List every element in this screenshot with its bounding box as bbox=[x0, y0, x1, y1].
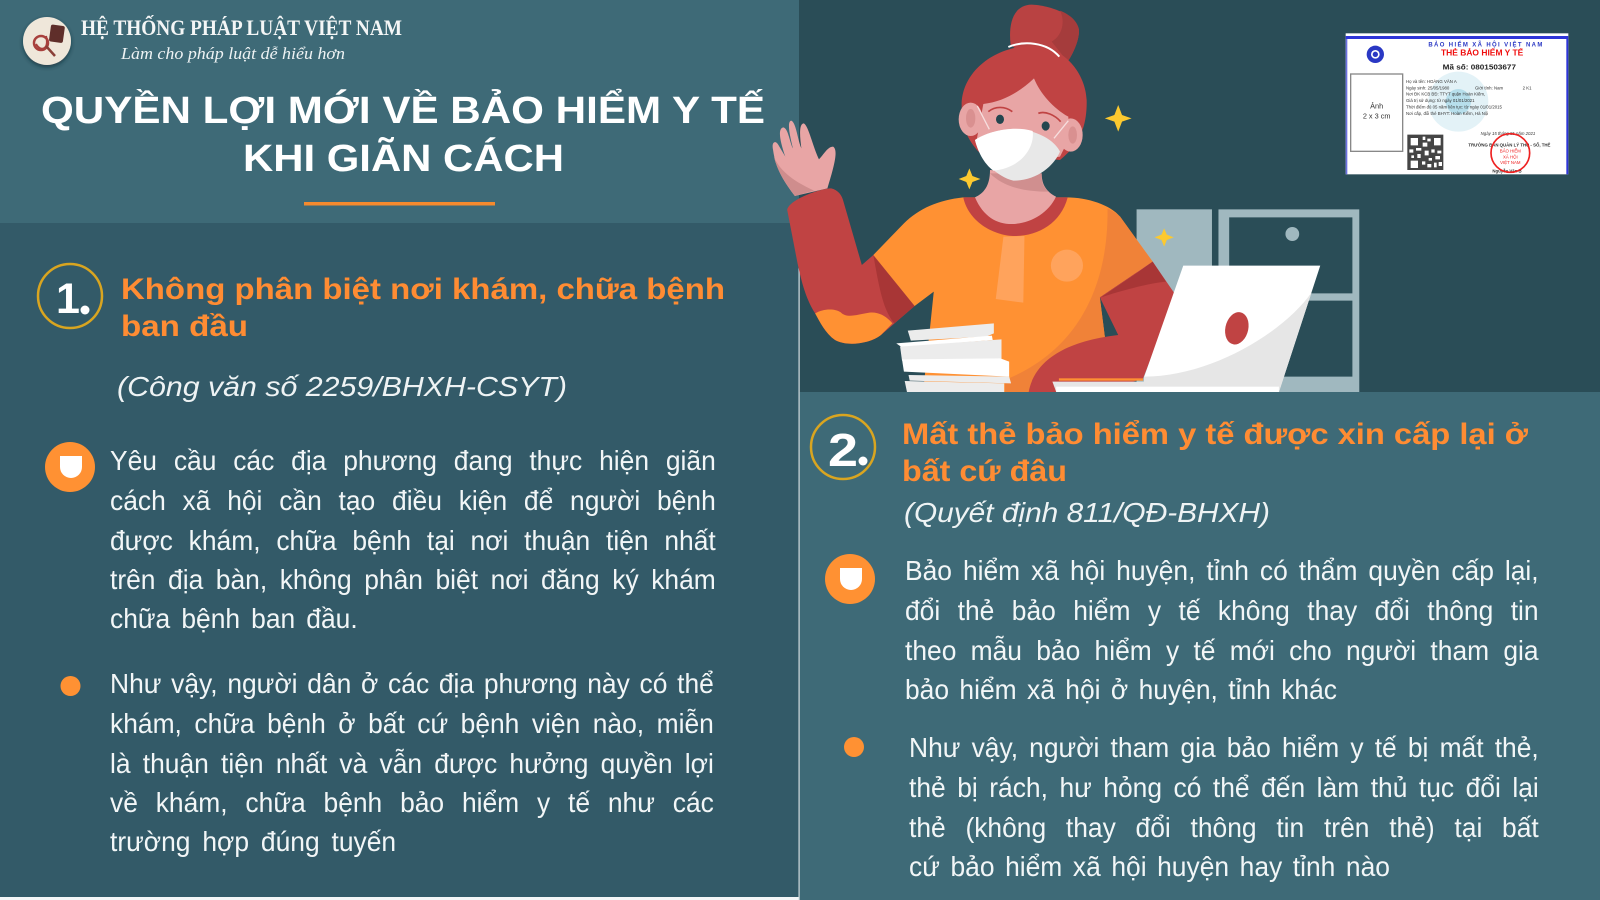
title underline bbox=[304, 202, 495, 206]
text block: section 1 first paragraph bbox=[110, 445, 716, 634]
section 2 number badge bbox=[811, 415, 875, 479]
section 2 shield bullet bbox=[825, 554, 875, 604]
stack of papers bbox=[896, 323, 1011, 392]
panel: right body bbox=[800, 392, 1600, 900]
cabinet bbox=[1137, 209, 1359, 392]
title: KHI GIÃN CÁCH bbox=[243, 136, 564, 180]
brand tagline: Làm cho pháp luật dễ hiểu hơn bbox=[120, 44, 345, 63]
text block: section 2 second paragraph: Như vậy, người tham gia bảo hiểm y tế bị mất thẻ, bbox=[909, 732, 1539, 763]
health insurance card: Ngày sinh: 25/05/1980 bbox=[1406, 85, 1450, 90]
health insurance card: 2 K1 bbox=[1523, 85, 1532, 90]
text block: section 2 second paragraph bbox=[909, 732, 1539, 882]
text block: section 1 second paragraph: trường hợp đúng tuyến bbox=[110, 826, 396, 857]
health insurance card: Giới tính: Nam bbox=[1475, 85, 1503, 90]
left arm bbox=[787, 188, 915, 344]
health insurance card: BẢO HIỂM XÃ HỘI VIỆT NAM bbox=[1428, 41, 1542, 49]
section 2 reference: (Quyết định 811/QĐ-BHXH) bbox=[904, 497, 1270, 528]
text block: section 2 second paragraph: thẻ bị rách, hư hỏng có thể đến làm thủ tục đổi lại bbox=[909, 772, 1539, 803]
hair bun bbox=[1010, 5, 1079, 67]
orange shirt bbox=[873, 197, 1153, 392]
text block: section 2 second paragraph: thẻ (không thay đổi thông tin trên thẻ) tại bất bbox=[909, 812, 1539, 843]
woman head with mask bbox=[959, 5, 1087, 224]
section 1 reference: (Công văn số 2259/BHXH-CSYT) bbox=[117, 371, 567, 402]
section 1 shield bullet bbox=[45, 442, 95, 492]
text block: section 2 first paragraph: bảo hiểm xã hội ở huyện, tỉnh khác bbox=[905, 674, 1337, 705]
health insurance card: Giá trị sử dụng: từ ngày 01/01/2021 bbox=[1406, 98, 1475, 103]
health insurance card bbox=[1346, 33, 1568, 174]
section 1 number badge: 1 bbox=[56, 275, 80, 323]
title bbox=[41, 87, 765, 180]
health insurance card: XÃ HỘI bbox=[1503, 155, 1518, 160]
text block: section 1 first paragraph: được khám, chữa bệnh tại nơi thuận tiện nhất bbox=[110, 525, 716, 556]
section 1 heading bbox=[121, 273, 725, 343]
title: QUYỀN LỢI MỚI VỀ BẢO HIỂM Y TẾ bbox=[41, 87, 765, 132]
mask bbox=[975, 129, 1060, 181]
section 1 number badge bbox=[38, 264, 102, 328]
text block: section 1 second paragraph: khám, chữa bệnh ở bất cứ bệnh viện nào, miễn bbox=[110, 708, 714, 739]
health insurance card: Họ và tên: HOÀNG VĂN A bbox=[1406, 79, 1457, 84]
health insurance card: Ảnh bbox=[1370, 101, 1383, 110]
section 2 number badge: 2 bbox=[828, 424, 858, 476]
neck bbox=[975, 170, 1056, 224]
text block: section 1 first paragraph: trên địa bàn, không phân biệt nơi đăng ký khám bbox=[110, 564, 716, 595]
health insurance card: Nguyễn Văn B bbox=[1492, 169, 1522, 174]
laptop bbox=[1052, 266, 1320, 392]
sparkles bbox=[959, 105, 1174, 247]
text block: section 1 second paragraph: về khám, chữa bệnh bảo hiểm y tế như các bbox=[110, 787, 714, 818]
text block: section 1 first paragraph: chữa bệnh ban đầu. bbox=[110, 603, 358, 634]
text block: section 1 first paragraph: Yêu cầu các địa phương đang thực hiện giãn bbox=[110, 445, 716, 476]
section 1 heading: Không phân biệt nơi khám, chữa bệnh bbox=[121, 273, 725, 306]
text block: section 1 second paragraph: là thuận tiện nhất và vẫn được hưởng quyền lợi bbox=[110, 748, 714, 779]
cabinet, woman body and laptop illustration bbox=[773, 105, 1359, 392]
health insurance card: VIỆT NAM bbox=[1500, 160, 1521, 165]
text block: section 2 second paragraph: cứ bảo hiểm xã hội huyện hay tỉnh nào bbox=[909, 851, 1390, 882]
section 2 heading: Mất thẻ bảo hiểm y tế được xin cấp lại ở bbox=[902, 418, 1529, 451]
health insurance card: Mã số: 0801503677 bbox=[1443, 63, 1516, 72]
health insurance card: 2 x 3 cm bbox=[1363, 112, 1391, 121]
health insurance card: Ngày 15 tháng 01 năm 2021 bbox=[1481, 131, 1536, 136]
text block: section 1 second paragraph: Như vậy, người dân ở các địa phương này có thể bbox=[110, 668, 714, 699]
text block: section 2 first paragraph: đổi thẻ bảo hiểm y tế không thay đổi thông tin bbox=[905, 595, 1539, 626]
panel: left body bbox=[0, 0, 799, 897]
health insurance card: THẺ BẢO HIỂM Y TẾ bbox=[1441, 48, 1524, 58]
hair bbox=[962, 46, 1087, 160]
section 1 heading: ban đầu bbox=[121, 310, 248, 343]
section 2 heading bbox=[902, 418, 1529, 488]
health insurance card: BẢO HIỂM bbox=[1500, 149, 1521, 154]
text block: section 2 first paragraph: theo mẫu bảo hiểm y tế mới cho người tham gia bbox=[905, 635, 1539, 666]
health insurance card: Thời điểm đủ 05 năm liên tục: từ ngày 01/01/2015 bbox=[1406, 104, 1503, 109]
brand name: HỆ THỐNG PHÁP LUẬT VIỆT NAM bbox=[81, 15, 402, 40]
text block: section 2 first paragraph bbox=[905, 555, 1539, 705]
text block: section 1 first paragraph: cách xã hội cần tạo điều kiện để người bệnh bbox=[110, 485, 716, 516]
text block: section 1 second paragraph bbox=[110, 668, 714, 857]
text block: section 2 first paragraph: Bảo hiểm xã hội huyện, tỉnh có thẩm quyền cấp lại, bbox=[905, 555, 1539, 586]
health insurance card: Nơi cấp, đổi thẻ BHYT: Hoàn Kiếm, Hà Nội bbox=[1406, 111, 1488, 116]
health insurance card: TRƯỞNG BAN QUẢN LÝ THU - SỔ, THẺ bbox=[1468, 143, 1551, 148]
logo bbox=[23, 17, 71, 65]
section 2 dot bullet bbox=[844, 737, 864, 757]
section 2 heading: bất cứ đâu bbox=[902, 455, 1067, 488]
health insurance card: Nơi ĐK KCB BĐ: TTYT quận Hoàn Kiếm, bbox=[1406, 91, 1485, 96]
panel: right illustration background bbox=[799, 0, 1600, 392]
panel: left header bbox=[0, 0, 799, 223]
right arm bbox=[1029, 262, 1176, 392]
face bbox=[959, 78, 1083, 167]
hand bbox=[773, 121, 836, 196]
section 1 dot bullet bbox=[60, 676, 80, 696]
